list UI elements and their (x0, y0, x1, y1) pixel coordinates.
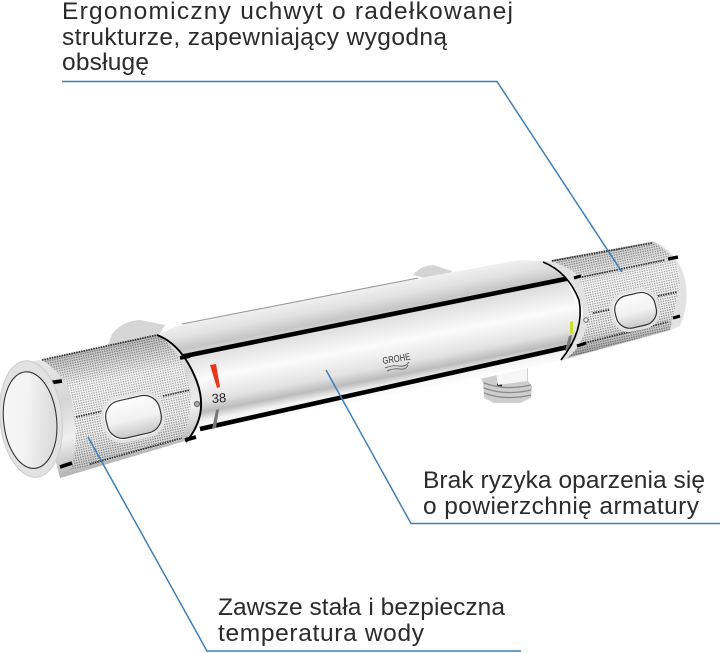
grey indicator right (565, 335, 572, 351)
logo: GROHE: GROHE (382, 352, 411, 367)
left knob button (99, 389, 167, 445)
right knob button (608, 286, 662, 334)
leader line: no scald risk (326, 370, 720, 524)
callout: constant temperature: Zawsze stała i bezpieczna (218, 594, 505, 621)
callout: no scald risk: o powierzchnię armatury (423, 493, 700, 520)
green cold-side mark (570, 321, 573, 334)
callout: ergonomic grip (62, 0, 513, 76)
small screw right (584, 318, 588, 322)
small screw left (194, 401, 200, 407)
logo: GROHE (382, 352, 411, 371)
right knob (543, 241, 687, 361)
end cap (0, 358, 68, 480)
dotted rows (42, 335, 190, 464)
callout: no scald risk: Brak ryzyka oparzenia się (423, 467, 705, 494)
rear wall mounts (108, 265, 452, 345)
red temperature mark (210, 364, 220, 388)
thermostat body (157, 260, 590, 444)
thermostat device (0, 241, 687, 480)
callout: no scald risk (423, 467, 705, 520)
grey indicator (212, 409, 219, 429)
leader line: constant temperature (88, 437, 521, 651)
callout: constant temperature: temperatura wody (218, 620, 425, 647)
outlet connector (480, 366, 532, 403)
left knob (0, 335, 201, 480)
temperature label 38: 38 (211, 390, 227, 406)
dotted rows (552, 243, 677, 343)
callout: constant temperature (218, 594, 505, 647)
callout: ergonomic grip: strukturze, zapewniający wygodną (62, 24, 447, 51)
leader line: ergonomic grip (62, 82, 622, 272)
callout: ergonomic grip: obsługę (62, 49, 149, 76)
